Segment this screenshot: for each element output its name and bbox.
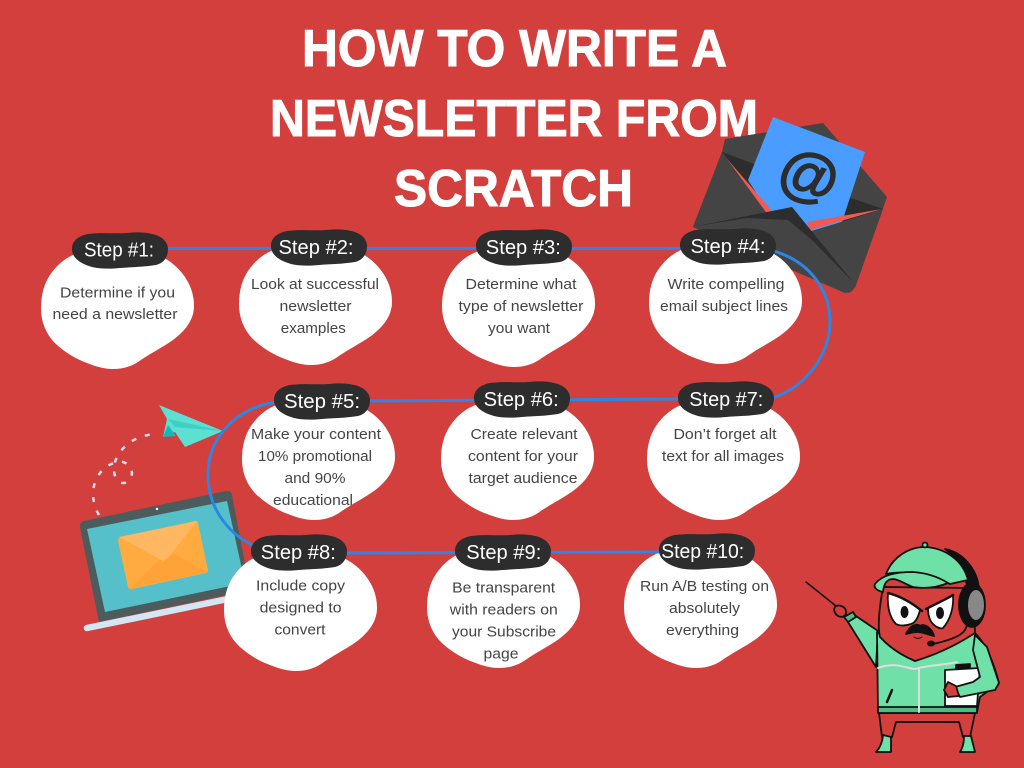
step 2 text: newsletter bbox=[280, 299, 352, 315]
connector path linking the steps bbox=[165, 248, 830, 553]
step 2 text bbox=[251, 277, 379, 337]
step 4 label: Step #4: bbox=[690, 236, 766, 258]
step 6 text bbox=[468, 427, 578, 487]
step 9 label bbox=[455, 534, 551, 571]
panel: step 5 bubble bbox=[242, 397, 395, 520]
step 7 label bbox=[678, 381, 774, 418]
title bbox=[270, 20, 758, 218]
step 1 text: Determine if you bbox=[60, 286, 175, 302]
step 1 text bbox=[52, 286, 178, 323]
panel: step 6 bubble bbox=[441, 397, 594, 520]
step 2 text: Look at successful bbox=[251, 277, 379, 293]
icon: mascot coach with pointer bbox=[806, 542, 999, 752]
step 9 text bbox=[449, 580, 558, 662]
step 7 text bbox=[662, 427, 784, 465]
panel: step 4 bubble bbox=[649, 241, 802, 364]
step 3 label: Step #3: bbox=[486, 237, 561, 259]
step 5 text: Make your content bbox=[251, 427, 381, 443]
step 8 text: Include copy bbox=[256, 578, 346, 594]
step 3 text: you want bbox=[488, 321, 550, 337]
step 9 text: your Subscribe bbox=[452, 624, 556, 640]
icon: paper plane with dashed trail bbox=[93, 405, 223, 515]
step 5 label bbox=[274, 383, 370, 420]
step 6 text: target audience bbox=[468, 471, 578, 487]
step 5 label: Step #5: bbox=[284, 391, 360, 413]
step 8 text bbox=[256, 578, 346, 638]
step 7 text: text for all images bbox=[662, 449, 784, 465]
step 10 label: Step #10: bbox=[661, 541, 744, 563]
step 2 label bbox=[271, 229, 367, 266]
step 3 label bbox=[476, 229, 572, 266]
step 8 label bbox=[251, 534, 347, 571]
step 6 label bbox=[474, 381, 570, 418]
title: SCRATCH bbox=[394, 160, 633, 218]
step 9 text: with readers on bbox=[449, 602, 558, 618]
step 4 text: email subject lines bbox=[660, 299, 788, 315]
step 6 label: Step #6: bbox=[484, 389, 559, 411]
step 10 text bbox=[640, 579, 769, 639]
panel: step 7 bubble bbox=[647, 397, 800, 520]
step 7 text: Don’t forget alt bbox=[674, 427, 776, 443]
step 7 label: Step #7: bbox=[689, 389, 763, 411]
step 4 text: Write compelling bbox=[668, 277, 784, 293]
step 1 label bbox=[72, 232, 168, 269]
step 10 text: absolutely bbox=[669, 601, 741, 617]
step 9 text: Be transparent bbox=[452, 580, 555, 596]
panel: step 9 bubble bbox=[427, 545, 580, 668]
panel: step 2 bubble bbox=[239, 242, 392, 365]
step 4 text bbox=[660, 277, 788, 315]
title: HOW TO WRITE A bbox=[302, 20, 727, 78]
title: NEWSLETTER FROM bbox=[270, 90, 758, 148]
step 6 text: content for your bbox=[468, 449, 578, 465]
step 5 text: educational bbox=[273, 493, 353, 509]
step 8 text: convert bbox=[274, 622, 326, 638]
step 9 label: Step #9: bbox=[466, 542, 541, 564]
panel: step 3 bubble bbox=[442, 244, 595, 367]
step 5 text: and 90% bbox=[284, 471, 346, 487]
step 8 text: designed to bbox=[260, 600, 342, 616]
icon: laptop with envelope bbox=[80, 491, 250, 628]
step 8 label: Step #8: bbox=[261, 542, 336, 564]
step 9 text: page bbox=[484, 646, 518, 662]
panel: step 1 bubble bbox=[41, 246, 194, 369]
step 2 text: examples bbox=[281, 321, 346, 337]
step 1 label: Step #1: bbox=[84, 240, 154, 262]
step 5 text: 10% promotional bbox=[258, 449, 372, 465]
panel: step 10 bubble bbox=[624, 545, 777, 668]
step 10 text: everything bbox=[666, 623, 739, 639]
step 2 label: Step #2: bbox=[278, 237, 354, 259]
step 4 label bbox=[680, 228, 776, 265]
step 1 text: need a newsletter bbox=[52, 307, 178, 323]
step 3 text bbox=[458, 277, 584, 337]
step 10 text: Run A/B testing on bbox=[640, 579, 769, 595]
step 6 text: Create relevant bbox=[470, 427, 578, 443]
step 5 text bbox=[251, 427, 381, 509]
icon: open envelope with at sign bbox=[693, 117, 887, 293]
icon: open envelope with at sign: @ bbox=[771, 134, 848, 215]
panel: step 8 bubble bbox=[224, 548, 377, 671]
step 3 text: Determine what bbox=[466, 277, 576, 293]
step 3 text: type of newsletter bbox=[458, 299, 584, 315]
step 10 label bbox=[659, 533, 755, 570]
